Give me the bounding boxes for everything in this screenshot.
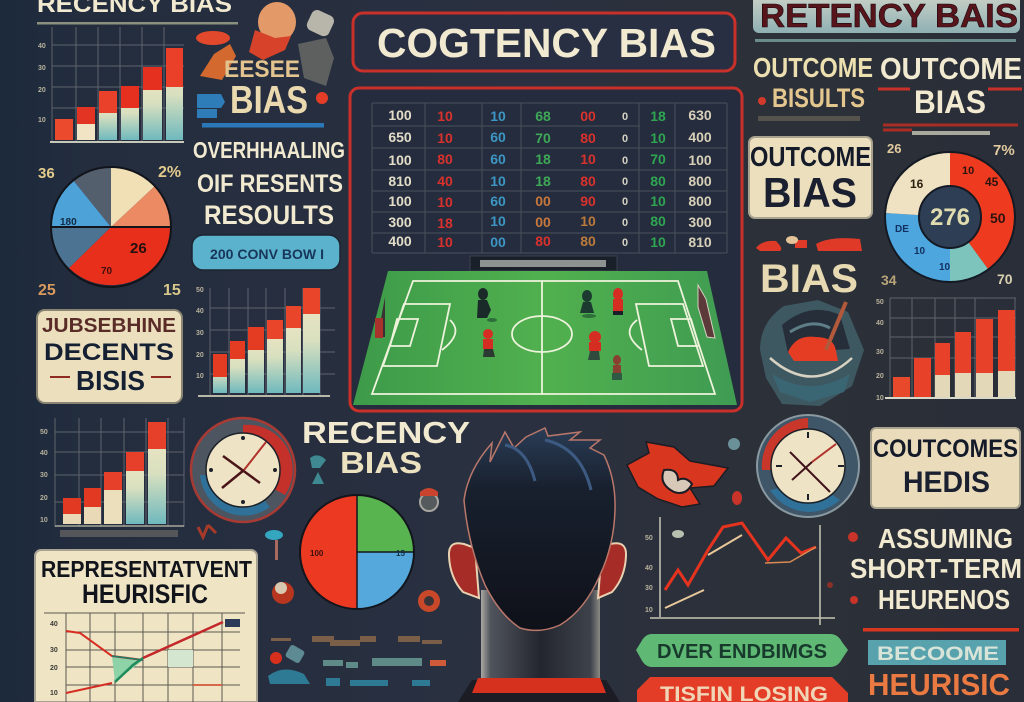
table: scoreboard: 800	[688, 193, 712, 209]
bar chart: top left: 30	[38, 65, 46, 72]
table: scoreboard: 18	[437, 215, 453, 231]
table: scoreboard: 810	[388, 173, 412, 189]
label: bias with ornament: BIAS	[760, 257, 858, 301]
table: scoreboard: 100	[388, 152, 412, 168]
pie chart: centre: 15	[396, 549, 405, 558]
bar chart: lower left: 40	[40, 450, 48, 457]
box: judgement decents bisis	[37, 310, 182, 403]
table: scoreboard: 100	[388, 193, 412, 209]
table: scoreboard: 80	[437, 151, 453, 167]
pitch	[353, 271, 737, 405]
panel: representativeness heuristic	[35, 550, 257, 702]
table: scoreboard: 80	[580, 233, 596, 249]
bar chart: lower left: 10	[40, 517, 48, 524]
text block: overhauling recent results	[193, 137, 345, 230]
title: COGTENCY BIAS	[377, 20, 716, 66]
donut chart: 45	[985, 175, 999, 189]
line chart: 10	[50, 690, 58, 697]
illustration: bias mascot collage: EESEE	[224, 56, 300, 83]
line chart: right: 10	[645, 607, 653, 614]
pie chart: left: 25	[38, 282, 56, 299]
table: scoreboard: 400	[388, 233, 412, 249]
ears	[449, 543, 479, 598]
table: scoreboard: 0	[622, 217, 628, 229]
table: scoreboard: 400	[688, 129, 712, 145]
table: scoreboard: 00	[490, 234, 506, 250]
donut chart: 276	[930, 204, 970, 231]
table: scoreboard: 00	[535, 193, 551, 209]
bar chart: right: 10	[876, 395, 884, 402]
pie chart: left: 70	[101, 266, 113, 277]
table: scoreboard: 0	[622, 196, 628, 208]
line chart	[44, 613, 245, 702]
pie chart: left: 36	[38, 165, 55, 182]
heading: heuristic bottom right	[863, 628, 1019, 702]
table: scoreboard: 10	[650, 234, 666, 250]
table: scoreboard: 18	[650, 108, 666, 124]
panel: representativeness heuristic: REPRESENTATVENT	[41, 556, 252, 582]
table: scoreboard: 18	[535, 151, 551, 167]
table: scoreboard: 10	[580, 151, 596, 167]
table: scoreboard: 10	[437, 108, 453, 124]
icon: red cap	[627, 438, 742, 507]
clock: right	[757, 415, 859, 517]
line chart: right: 50	[645, 535, 653, 542]
text block: outcome bias	[878, 51, 1022, 135]
donut chart: 10	[914, 246, 926, 257]
table: scoreboard: 80	[580, 130, 596, 146]
heading: heuristic bottom right: BECOOME	[877, 644, 999, 665]
scoreboard strip	[470, 256, 617, 271]
donut chart: 26	[887, 141, 901, 156]
table: scoreboard: 10	[490, 213, 506, 229]
donut chart: 10	[939, 262, 951, 273]
table: scoreboard	[372, 103, 727, 253]
table: scoreboard: 80	[650, 173, 666, 189]
box: outcome bias: OUTCOME	[750, 141, 871, 172]
table: scoreboard: 68	[535, 108, 551, 124]
label: bias with ornament	[756, 236, 862, 301]
bar chart: right: 40	[876, 320, 884, 327]
pie chart: left	[38, 164, 181, 299]
table: scoreboard: 300	[688, 214, 712, 230]
table: scoreboard: 650	[388, 129, 412, 145]
table: scoreboard: 10	[580, 213, 596, 229]
table: scoreboard: 70	[650, 151, 666, 167]
table: scoreboard: 80	[535, 233, 551, 249]
heading: recency bias centre: BIAS	[340, 445, 422, 480]
heading: recency bias centre: RECENCY	[302, 415, 470, 450]
bar chart: middle left: 30	[196, 330, 204, 337]
text block: outcome bisults: OUTCOME	[753, 52, 873, 83]
table: scoreboard: 60	[490, 151, 506, 167]
table: scoreboard: 0	[622, 176, 628, 188]
line chart: right: 40	[645, 565, 653, 572]
bar chart: right: 50	[876, 299, 884, 306]
bar chart: right: 30	[876, 349, 884, 356]
text block: outcome bias: BIAS	[914, 84, 986, 120]
table: scoreboard: 0	[622, 237, 628, 249]
bar chart: middle left: 50	[196, 287, 204, 294]
table: scoreboard: 60	[490, 193, 506, 209]
line chart: 30	[50, 647, 58, 654]
neck	[481, 590, 600, 678]
box: outcome bias	[749, 137, 872, 218]
donut chart	[881, 141, 1015, 288]
table: scoreboard: 10	[437, 194, 453, 210]
table: scoreboard: 100	[688, 152, 712, 168]
bar chart: top left: 10	[38, 117, 46, 124]
box: judgement decents bisis: BISIS	[76, 365, 145, 396]
table: scoreboard: 800	[688, 173, 712, 189]
bar chart: lower left: 50	[40, 429, 48, 436]
heading: heuristic bottom right: HEURISIC	[868, 667, 1010, 702]
table: scoreboard: 810	[688, 234, 712, 250]
table: scoreboard: 0	[622, 133, 628, 145]
table: scoreboard: 10	[650, 130, 666, 146]
bar chart: middle left: 20	[196, 352, 204, 359]
table: scoreboard: 40	[437, 173, 453, 189]
table: scoreboard: 0	[622, 155, 628, 167]
line chart: right	[645, 517, 858, 625]
bar chart: middle left: 10	[196, 373, 204, 380]
pill: red losing	[637, 677, 848, 702]
small icons around pie	[198, 455, 440, 612]
heading: recency bias centre	[302, 415, 470, 480]
bar chart: middle left: 40	[196, 308, 204, 315]
table: scoreboard: 80	[650, 213, 666, 229]
table: scoreboard: 10	[437, 234, 453, 250]
pill: green over: DVER ENDBIMGS	[657, 641, 827, 663]
text block: outcome bisults: BISULTS	[772, 83, 865, 113]
table: scoreboard: 90	[580, 193, 596, 209]
table: scoreboard: 630	[688, 107, 712, 123]
pie chart: centre	[300, 495, 414, 609]
line chart: 40	[50, 621, 58, 628]
table: scoreboard: 00	[535, 214, 551, 230]
text block: overhauling recent results: OVERHHAALING	[193, 137, 345, 163]
table: scoreboard: 0	[622, 111, 628, 123]
text block: overhauling recent results: OIF RESENTS	[197, 170, 343, 198]
text block: outcome bisults	[753, 52, 873, 121]
bar chart: lower left	[40, 418, 184, 537]
illustration: bias mascot collage	[196, 2, 336, 128]
line chart: 20	[50, 665, 58, 672]
table: scoreboard: 70	[535, 130, 551, 146]
shirt	[458, 680, 620, 702]
table: scoreboard: 300	[388, 214, 412, 230]
pie chart: centre: 100	[310, 549, 324, 558]
table: scoreboard: 18	[535, 173, 551, 189]
box: outcomes heuristic: HEDIS	[903, 466, 990, 499]
panel: scoreboard and pitch	[350, 88, 742, 411]
donut chart: DE	[895, 224, 909, 235]
donut chart: 16	[910, 177, 924, 191]
table: scoreboard: 00	[580, 108, 596, 124]
table: scoreboard: 100	[388, 107, 412, 123]
players	[477, 288, 623, 380]
donut chart: 50	[990, 210, 1006, 226]
pill: blue label	[192, 235, 340, 270]
bar chart: lower left: 30	[40, 472, 48, 479]
pie chart: left: 15	[163, 282, 181, 299]
table: scoreboard: 10	[490, 108, 506, 124]
label: BIAS: BIAS	[230, 79, 308, 122]
box: outcomes heuristic	[871, 428, 1020, 508]
text block: overhauling recent results: RESOULTS	[204, 200, 334, 230]
line chart: right: 30	[645, 585, 653, 592]
donut chart: 70	[997, 271, 1013, 287]
table: scoreboard: 80	[580, 173, 596, 189]
icon: brain gauge	[760, 300, 864, 406]
bar chart: right: 20	[876, 373, 884, 380]
small text collage	[268, 636, 446, 686]
text block: assuming short-term	[850, 523, 1022, 615]
donut chart: 10	[962, 165, 974, 177]
panel: representativeness heuristic: HEURISFIC	[82, 579, 208, 609]
table: scoreboard: 10	[437, 130, 453, 146]
bar chart: top left: 20	[38, 87, 46, 94]
pie chart: left: 26	[130, 240, 147, 257]
illustration: head seen from behind	[449, 428, 626, 702]
donut chart: 34	[881, 272, 897, 288]
box: judgement decents bisis: JUBSEBHINE	[42, 315, 176, 337]
table: scoreboard: 60	[490, 129, 506, 145]
bar chart: right	[876, 298, 1016, 402]
bar chart: lower left: 20	[40, 495, 48, 502]
bar chart: top left: 40	[38, 43, 46, 50]
bar chart: top left	[38, 27, 184, 142]
hair	[464, 428, 615, 630]
table: scoreboard: 10	[490, 173, 506, 189]
clock: left	[191, 418, 295, 522]
pill: blue label: 200 CONV BOW I	[210, 246, 324, 262]
pie chart: left: 2%	[158, 164, 181, 181]
pie chart: left: 180	[60, 217, 77, 228]
table: scoreboard: 10	[650, 193, 666, 209]
bar chart: middle left	[196, 287, 335, 396]
donut chart: 7%	[993, 142, 1015, 159]
box: judgement decents bisis: DECENTS	[44, 339, 174, 366]
box: outcome bias: BIAS	[763, 169, 857, 216]
pill: green over	[636, 634, 848, 667]
